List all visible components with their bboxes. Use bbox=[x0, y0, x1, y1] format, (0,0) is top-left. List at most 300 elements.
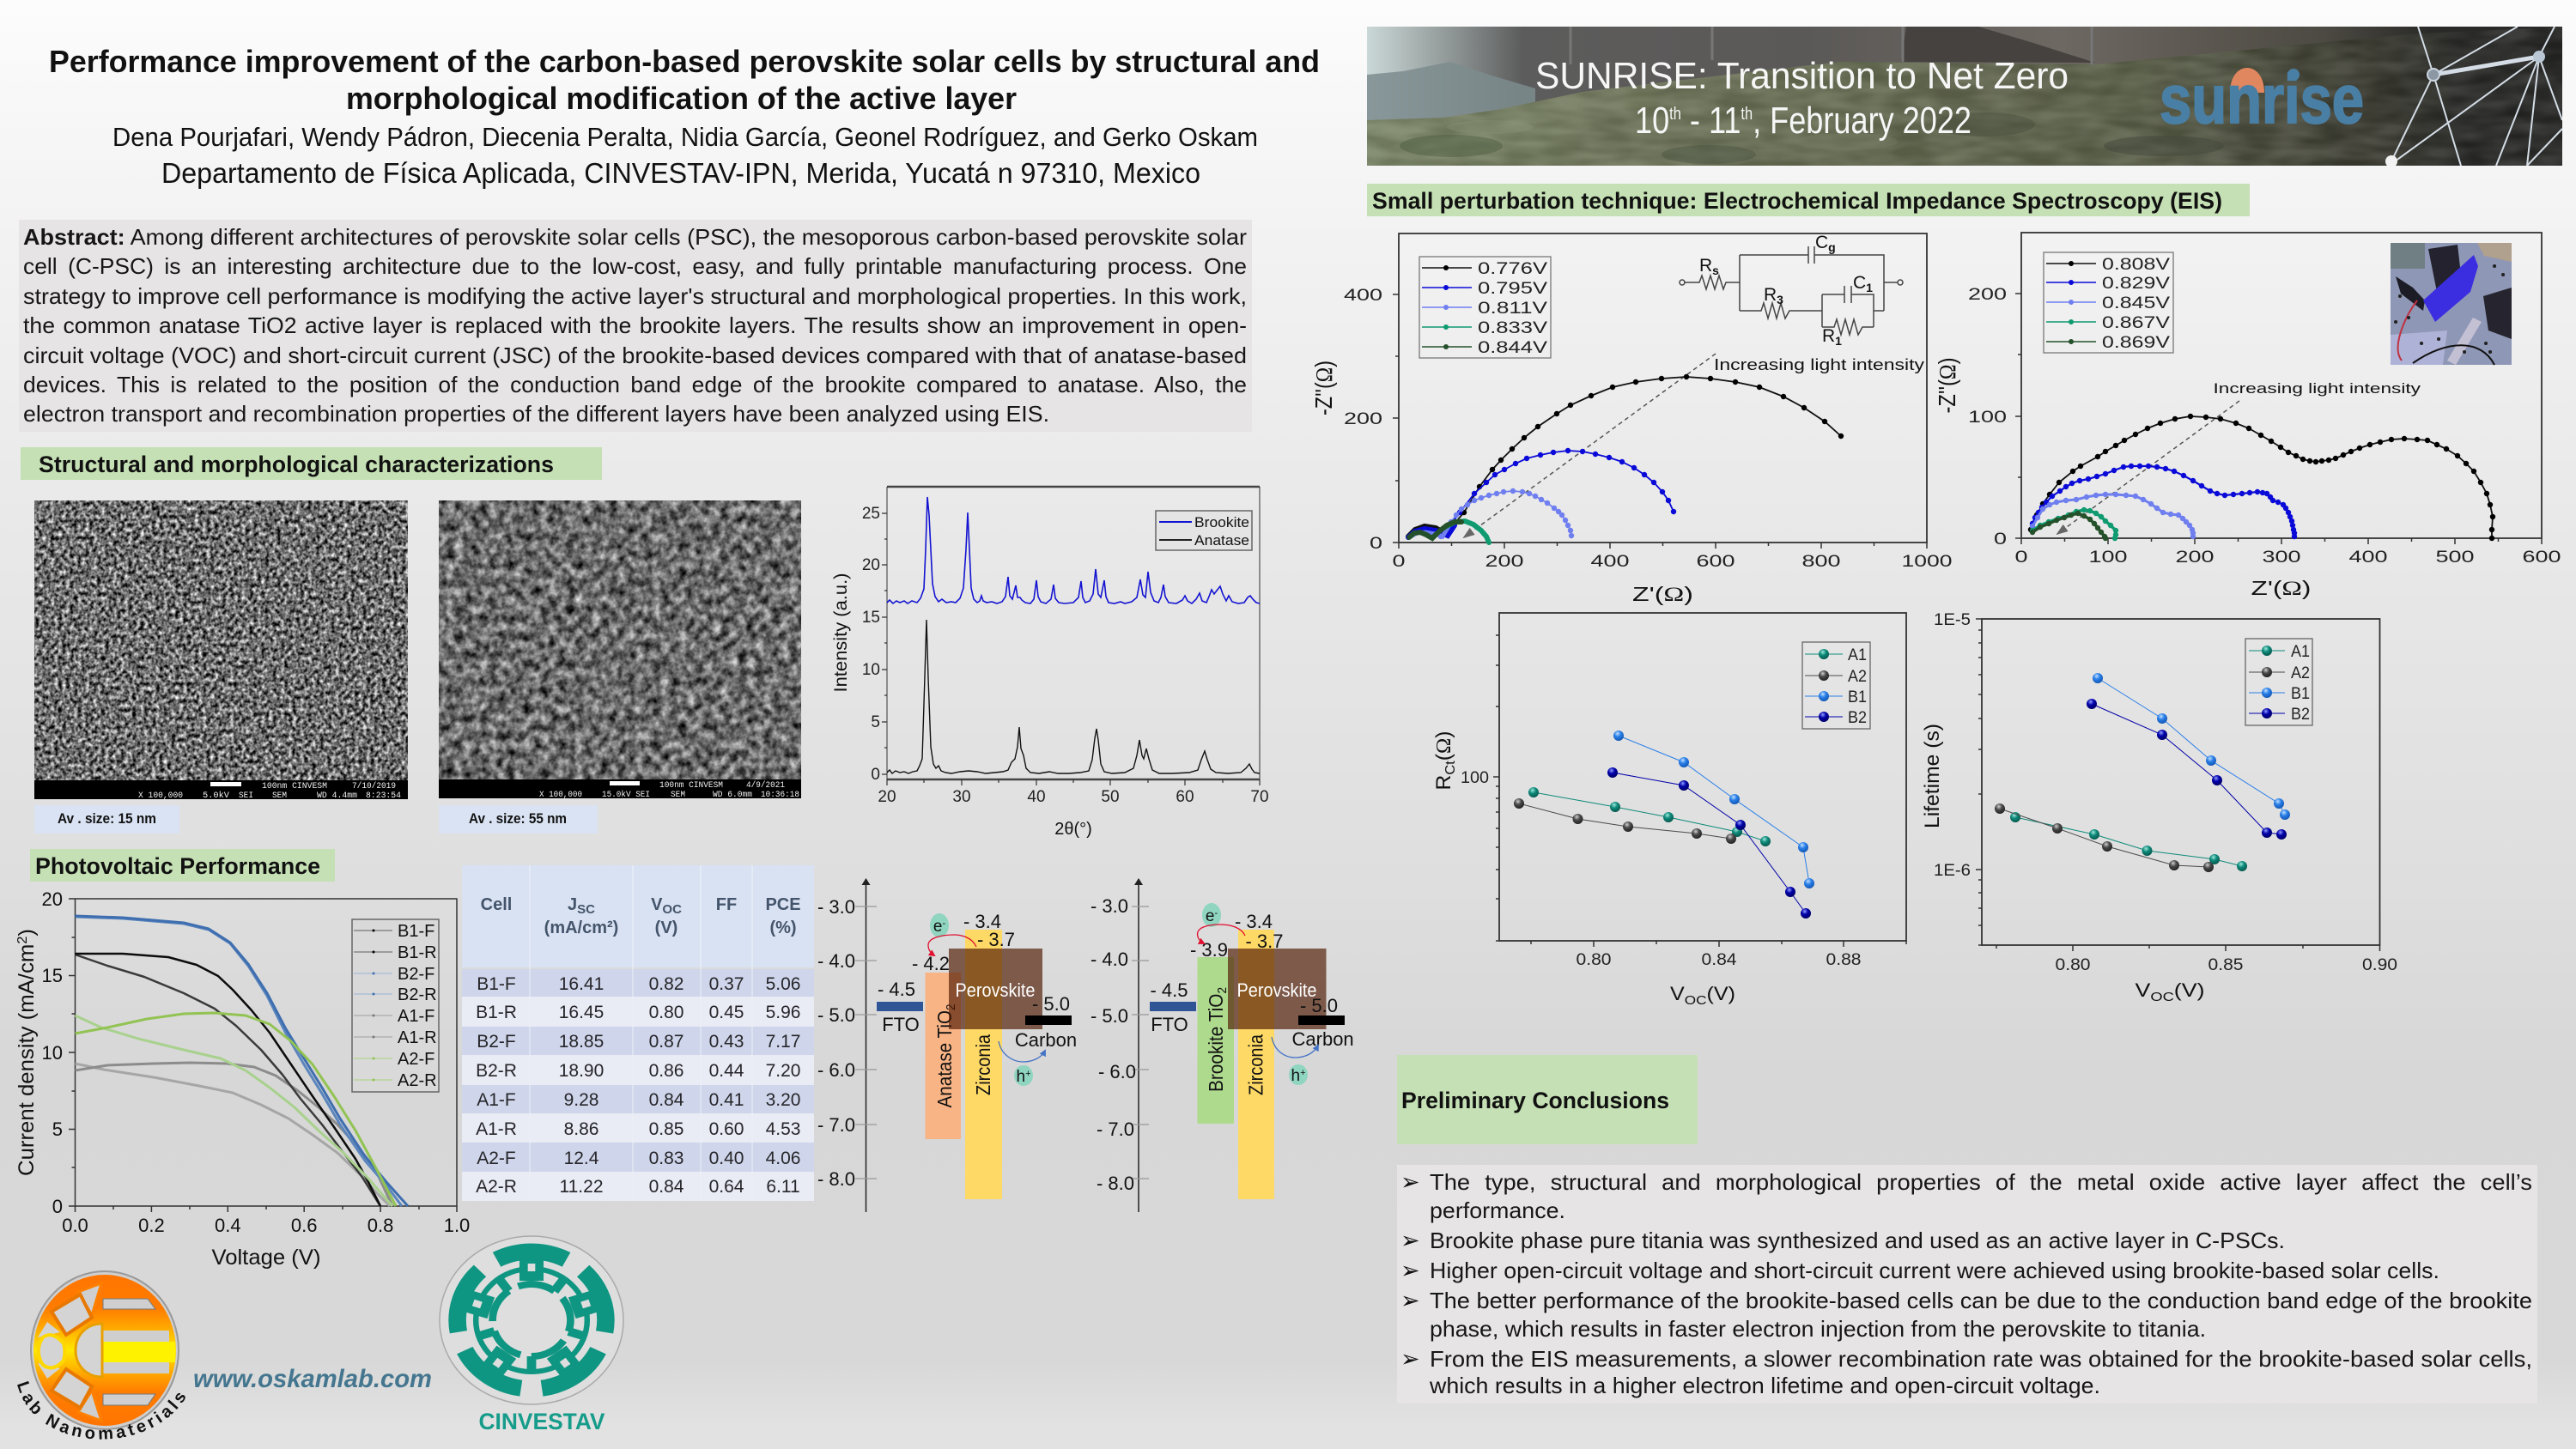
conclusion 2: Brookite phase pure titania was synthesized and used as an active layer in C-PSCs. bbox=[1430, 1228, 2285, 1253]
J-V legend: B2-R bbox=[398, 985, 437, 1004]
table row B1-F: B1-F bbox=[477, 974, 516, 994]
series 0.869 V bbox=[2032, 513, 2105, 538]
y tick labels: 200 bbox=[1968, 286, 2007, 304]
J-V x tick labels: 0.4 bbox=[215, 1215, 241, 1236]
logo: Lab Nanomaterials bbox=[17, 1270, 185, 1440]
level labels: - 3.9 bbox=[1190, 939, 1228, 961]
carbon level: - 5.0 bbox=[1032, 993, 1070, 1015]
brookite layer bbox=[1197, 957, 1234, 1124]
panel: abstract: devices. This is related to the position of the conduction band edge of the brookite compared to anatase. Also, the bbox=[23, 372, 1247, 397]
legend: 0.833V bbox=[1478, 319, 1547, 337]
x tick labels: 400 bbox=[1590, 553, 1630, 571]
SEM micrograph: 15 nm: 5.0kV bbox=[203, 791, 229, 801]
FTO level: - 4.5 bbox=[1150, 979, 1188, 1001]
curve A1-R bbox=[76, 1064, 390, 1206]
table row A2-R bbox=[476, 1177, 800, 1197]
table row A2-F: 0.83 bbox=[649, 1149, 683, 1168]
y axis title: -Z''(Ω) bbox=[1311, 361, 1338, 415]
XRD x tick labels: 20 bbox=[878, 788, 896, 806]
tick labels: 0.90 bbox=[2362, 956, 2397, 974]
series 0.811 V bbox=[1441, 491, 1571, 537]
table row B2-F: 7.17 bbox=[766, 1032, 800, 1052]
equivalent circuit: R bbox=[1699, 256, 1712, 276]
heading: electrochemical impedance spectroscopy: Small perturbation technique: Electrochemical Impedance Spectroscopy (EIS) bbox=[1372, 188, 2222, 214]
SEM micrograph: 15 nm: WD 4.4mm bbox=[317, 791, 357, 801]
curve A2-R bbox=[76, 1016, 392, 1206]
SEM micrograph: 15 nm: SEM bbox=[272, 791, 287, 801]
hole transfer: + bbox=[1300, 1068, 1306, 1078]
x tick labels: 1000 bbox=[1901, 553, 1953, 571]
table row B2-R: 0.44 bbox=[709, 1061, 744, 1081]
banner date: th bbox=[1669, 105, 1681, 124]
legend: 0.795V bbox=[1478, 280, 1547, 298]
title: morphological modification of the active layer bbox=[346, 81, 1017, 116]
legend: B1 bbox=[2291, 685, 2310, 703]
legend: 0.845V bbox=[2102, 294, 2170, 312]
J-V y tick labels: 15 bbox=[42, 965, 63, 986]
logo caption: CINVESTAV bbox=[479, 1409, 605, 1434]
caption: average size 55 nm: Av . size: 55 nm bbox=[469, 810, 567, 827]
series 0.795 V bbox=[1443, 451, 1674, 535]
series B2 bbox=[1607, 767, 1811, 919]
J-V y axis title: Current density (mA/cm bbox=[15, 950, 39, 1176]
table row B1-F: 0.37 bbox=[709, 974, 744, 994]
x tick labels: 800 bbox=[1801, 553, 1841, 571]
SEM micrograph: 55 nm: 4/9/2021 bbox=[746, 780, 785, 791]
energy axis: - 4.0 bbox=[1091, 949, 1128, 970]
curve A1-F bbox=[76, 1063, 392, 1206]
equivalent circuit: g bbox=[1828, 240, 1836, 254]
zirconia layer: Zirconia bbox=[972, 1034, 994, 1095]
energy axis: - 7.0 bbox=[817, 1114, 855, 1136]
chart: Nyquist plot, brookite bbox=[1935, 233, 2561, 599]
panel: abstract bbox=[19, 220, 1252, 432]
energy axis: - 3.0 bbox=[1091, 895, 1128, 917]
equivalent circuit: R bbox=[1822, 326, 1835, 346]
equivalent circuit: R bbox=[1764, 285, 1777, 305]
hole transfer bbox=[1272, 1037, 1318, 1085]
XRD legend: Anatase bbox=[1194, 532, 1249, 549]
conclusion 5: which results in a higher electron lifetime and open-circuit voltage. bbox=[1429, 1373, 2100, 1398]
table row B1-R bbox=[476, 1003, 800, 1022]
banner title: SUNRISE: Transition to Net Zero bbox=[1535, 55, 2069, 97]
SEM micrograph: 55 nm: X 100,000 bbox=[539, 791, 582, 800]
J-V x tick labels: 0.2 bbox=[138, 1215, 165, 1236]
legend: B1 bbox=[1848, 688, 1867, 706]
heading: preliminary conclusions: Preliminary Conclusions bbox=[1401, 1088, 1669, 1113]
authors: Dena Pourjafari, Wendy Pádron, Diecenia Peralta, Nidia García, Geonel Rodríguez, and Gerko Oskam bbox=[112, 122, 1258, 152]
equivalent circuit: C bbox=[1815, 233, 1828, 252]
legend bbox=[1419, 257, 1551, 358]
level labels bbox=[912, 911, 1015, 974]
energy axis: - 8.0 bbox=[1097, 1173, 1134, 1194]
zirconia layer bbox=[1238, 930, 1274, 1199]
x tick labels: 400 bbox=[2349, 549, 2387, 567]
energy axis: - 5.0 bbox=[1091, 1005, 1128, 1027]
perovskite layer bbox=[949, 949, 1042, 1029]
y tick labels: 100 bbox=[1968, 409, 2007, 427]
J-V x tick labels: 0.8 bbox=[368, 1215, 393, 1236]
energy axis bbox=[1091, 879, 1149, 1212]
tick labels bbox=[1461, 769, 1862, 969]
series B1 bbox=[1613, 731, 1814, 888]
SEM micrograph: 55 nm: 100nm CINVESM bbox=[659, 781, 723, 791]
banner date: , February 2022 bbox=[1753, 100, 1971, 142]
tick labels: 1E-6 bbox=[1934, 862, 1971, 880]
energy axis: - 8.0 bbox=[817, 1168, 855, 1190]
table row A1-R bbox=[476, 1119, 800, 1139]
legend: B2 bbox=[2291, 706, 2310, 724]
legend: A2 bbox=[1848, 668, 1867, 686]
XRD y tick labels: 15 bbox=[862, 609, 880, 627]
y tick labels: 200 bbox=[1344, 410, 1382, 428]
trend annotation: Increasing light intensity bbox=[1714, 356, 1924, 373]
x tick labels: 200 bbox=[1485, 553, 1523, 571]
electron transfer: - bbox=[942, 919, 945, 929]
conclusion 1: performance. bbox=[1430, 1197, 1565, 1223]
SEM micrograph: 15 nm: 7/10/2019 bbox=[352, 781, 396, 791]
XRD x tick labels: 30 bbox=[952, 788, 971, 806]
chart: J-V curves bbox=[15, 888, 470, 1270]
low-frequency arcs bbox=[1408, 521, 1489, 543]
y axis title: -Z''(Ω) bbox=[1935, 357, 1961, 414]
series B1 bbox=[2093, 673, 2290, 820]
x axis title: (V) bbox=[2174, 979, 2205, 1001]
perovskite layer bbox=[1228, 949, 1326, 1029]
table row A2-F bbox=[477, 1149, 800, 1168]
table row B1-R: 0.80 bbox=[649, 1003, 683, 1022]
equivalent circuit: C bbox=[1853, 273, 1866, 293]
chart: electron lifetime vs voltage bbox=[1921, 611, 2397, 1004]
energy axis: - 4.0 bbox=[817, 950, 855, 972]
series B2 bbox=[2087, 699, 2287, 840]
y tick labels: 0 bbox=[1370, 535, 1382, 553]
legend: 0.811V bbox=[1478, 300, 1547, 318]
conclusion 2: ➢ bbox=[1400, 1228, 1420, 1254]
tick labels: 0.84 bbox=[1702, 951, 1737, 969]
conclusion 1: ➢ bbox=[1400, 1169, 1420, 1196]
XRD y tick labels: 25 bbox=[862, 505, 880, 523]
J-V legend: A2-F bbox=[398, 1050, 434, 1069]
FTO level: FTO bbox=[1151, 1014, 1188, 1035]
table row B1-R: 5.96 bbox=[766, 1003, 800, 1022]
x tick labels: 100 bbox=[2088, 549, 2128, 567]
XRD legend bbox=[1156, 511, 1252, 550]
conclusion 5: From the EIS measurements, a slower recombination rate was obtained for the brookite-based solar cells, bbox=[1430, 1346, 2532, 1372]
table row B2-F: 0.43 bbox=[709, 1032, 744, 1052]
table header: (%) bbox=[769, 919, 797, 937]
equivalent circuit: s bbox=[1712, 264, 1719, 277]
series A2 bbox=[1514, 798, 1736, 844]
electron transfer: - bbox=[1214, 908, 1218, 919]
J-V y axis title: 2 bbox=[15, 936, 30, 944]
table row A1-R: 0.60 bbox=[709, 1119, 744, 1139]
table row B1-F bbox=[477, 974, 800, 994]
J-V legend: A2-R bbox=[398, 1071, 437, 1090]
J-V y tick labels bbox=[42, 888, 63, 1217]
photo: measurement setup bbox=[2391, 243, 2512, 365]
J-V y tick labels: 0 bbox=[52, 1196, 63, 1217]
J-V legend: B1-R bbox=[398, 943, 437, 962]
J-V y tick labels: 5 bbox=[52, 1119, 63, 1140]
curve A2-F bbox=[76, 1013, 396, 1206]
SEM micrograph: 55 nm: SEM bbox=[671, 791, 685, 800]
table row A1-R: 8.86 bbox=[564, 1119, 598, 1139]
x axis title: Z'( Ω ) bbox=[2251, 577, 2312, 599]
J-V legend bbox=[352, 919, 439, 1092]
panel: abstract: strategy to improve cell performance is modifying the active layer's structural and morphological properties. In this work, bbox=[23, 283, 1247, 309]
zirconia layer bbox=[965, 930, 1002, 1199]
SEM micrograph: 15 nm bbox=[34, 500, 408, 801]
conclusion 1 bbox=[1400, 1169, 2532, 1223]
energy axis: - 7.0 bbox=[1097, 1119, 1134, 1140]
energy axis: - 6.0 bbox=[817, 1059, 855, 1081]
conclusion 4: ➢ bbox=[1400, 1288, 1420, 1314]
carbon level: Carbon bbox=[1015, 1029, 1077, 1051]
y axis title: ( bbox=[1432, 754, 1455, 761]
table row A2-F: 4.06 bbox=[766, 1149, 800, 1168]
band diagram: brookite device bbox=[1091, 879, 1354, 1212]
table header: J bbox=[568, 895, 577, 914]
conclusion 4 bbox=[1400, 1288, 2532, 1342]
J-V legend: B2-F bbox=[398, 965, 434, 984]
table row B1-F: 5.06 bbox=[766, 974, 800, 994]
y axis title: Ct bbox=[1443, 761, 1458, 775]
table header: FF bbox=[716, 895, 737, 914]
x tick labels: 0 bbox=[1393, 553, 1405, 571]
level labels: - 3.7 bbox=[1245, 931, 1284, 952]
table row A1-F bbox=[477, 1090, 800, 1110]
anatase curve bbox=[887, 620, 1260, 773]
table row A1-F: 3.20 bbox=[766, 1090, 800, 1110]
x axis title: (V) bbox=[1706, 983, 1735, 1004]
carbon level: - 5.0 bbox=[1300, 995, 1338, 1016]
XRD y tick labels: 10 bbox=[862, 661, 880, 679]
FTO level bbox=[1150, 979, 1196, 1035]
electron transfer: e bbox=[933, 918, 942, 936]
table row B2-R: B2-R bbox=[476, 1061, 517, 1081]
energy axis bbox=[817, 879, 877, 1212]
table row A2-R: 0.84 bbox=[649, 1177, 684, 1197]
legend: 0.829V bbox=[2102, 275, 2170, 293]
SEM micrograph: 55 nm: WD 6.0mm bbox=[713, 791, 752, 800]
y axis title: Ω) bbox=[1432, 731, 1455, 754]
x tick labels: 600 bbox=[1697, 553, 1735, 571]
curve B2-F bbox=[76, 916, 408, 1206]
level labels bbox=[1190, 911, 1284, 961]
tick labels: 0.85 bbox=[2208, 956, 2243, 974]
energy axis: - 3.0 bbox=[817, 896, 855, 918]
XRD x tick labels: 50 bbox=[1101, 788, 1120, 806]
tick labels bbox=[1934, 611, 2397, 974]
brookite curve bbox=[887, 497, 1260, 603]
XRD y tick labels: 5 bbox=[871, 713, 880, 731]
SEM micrograph: 55 nm: 15.0kV SEI bbox=[602, 790, 650, 800]
table header: OC bbox=[662, 902, 682, 917]
legend: 0.776V bbox=[1478, 260, 1547, 278]
anatase layer: Anatase TiO bbox=[933, 999, 956, 1107]
table row A2-F: A2-F bbox=[477, 1149, 516, 1168]
table row B2-F: B2-F bbox=[477, 1032, 516, 1052]
curve B1-R bbox=[76, 955, 380, 1206]
y tick labels bbox=[1968, 286, 2007, 549]
panel: abstract: electron transport and recombination properties of the different layers have been analyzed using EIS. bbox=[23, 401, 1049, 427]
table row B1-R: B1-R bbox=[476, 1003, 517, 1022]
table row B2-F: 18.85 bbox=[559, 1032, 604, 1052]
heading: preliminary conclusions bbox=[1397, 1055, 1698, 1144]
series 0.808 V bbox=[2031, 416, 2493, 538]
conclusion 5 bbox=[1400, 1346, 2532, 1398]
logo: sunrise bbox=[2160, 68, 2363, 124]
tick labels: 1E-5 bbox=[1934, 611, 1971, 629]
carbon level bbox=[1292, 995, 1354, 1050]
panel: abstract: circuit voltage (VOC) and short-circuit current (JSC) of the brookite-based devices compared with that of anatase-based bbox=[23, 343, 1247, 368]
x tick labels: 500 bbox=[2435, 549, 2475, 567]
J-V legend: B1-F bbox=[398, 922, 434, 941]
table row B2-R: 0.86 bbox=[649, 1061, 683, 1081]
XRD y tick labels: 0 bbox=[871, 766, 880, 784]
series A1 bbox=[2010, 812, 2247, 871]
J-V y tick labels: 20 bbox=[42, 888, 63, 910]
banner date: - 11 bbox=[1681, 100, 1741, 142]
series 0.845 V bbox=[2032, 494, 2193, 537]
XRD x tick labels: 70 bbox=[1250, 788, 1269, 806]
table row A1-F: 0.41 bbox=[709, 1090, 744, 1110]
x axis title: OC bbox=[2150, 990, 2174, 1004]
zirconia layer: Zirconia bbox=[1245, 1034, 1267, 1095]
J-V y axis title: ) bbox=[15, 929, 39, 937]
table row B2-R: 7.20 bbox=[766, 1061, 800, 1081]
x axis title: OC bbox=[1685, 993, 1707, 1008]
XRD legend: Brookite bbox=[1194, 514, 1249, 530]
heading: photovoltaic performance: Photovoltaic Performance bbox=[35, 853, 320, 879]
level labels: - 3.4 bbox=[1235, 911, 1273, 932]
table header: Cell bbox=[481, 895, 512, 914]
caption: average size 15 nm bbox=[34, 805, 179, 834]
XRD x tick labels bbox=[878, 788, 1269, 806]
table row A2-R: 11.22 bbox=[560, 1177, 603, 1197]
table row A1-F: 0.84 bbox=[649, 1090, 684, 1110]
banner date: 10 bbox=[1635, 100, 1677, 142]
legend: 0.867V bbox=[2102, 314, 2170, 332]
affiliation: Departamento de Física Aplicada, CINVESTAV-IPN, Merida, Yucatá n 97310, Mexico bbox=[161, 157, 1200, 189]
table row A2-R: 6.11 bbox=[766, 1177, 800, 1197]
perovskite layer: Perovskite bbox=[1236, 979, 1317, 1001]
x tick labels: 0 bbox=[2014, 549, 2028, 567]
XRD x tick labels: 60 bbox=[1176, 788, 1194, 806]
series A2 bbox=[1995, 803, 2214, 872]
trend annotation: Increasing light intensity bbox=[2214, 380, 2421, 397]
legend: 0.844V bbox=[1478, 339, 1547, 357]
trend annotation bbox=[1464, 354, 1924, 537]
tick labels: 100 bbox=[1461, 769, 1489, 787]
electron transfer bbox=[928, 913, 976, 955]
equivalent circuit: 1 bbox=[1835, 334, 1842, 348]
table header: SC bbox=[577, 902, 595, 917]
hole transfer: h bbox=[1016, 1068, 1025, 1086]
legend: A2 bbox=[2291, 664, 2310, 682]
FTO level: FTO bbox=[882, 1014, 920, 1035]
SEM micrograph: 15 nm: 100nm CINVESM bbox=[262, 782, 327, 791]
conclusion 3: Higher open-circuit voltage and short-circuit current were achieved using brookite-based solar cells. bbox=[1430, 1258, 2439, 1283]
title: Performance improvement of the carbon-based perovskite solar cells by structural and bbox=[49, 44, 1320, 79]
table header: (V) bbox=[655, 919, 677, 937]
caption: average size 55 nm bbox=[439, 805, 598, 834]
legend: 0.869V bbox=[2102, 334, 2170, 352]
anatase layer: 2 bbox=[944, 1004, 958, 1010]
energy axis: - 6.0 bbox=[1098, 1061, 1136, 1082]
legend bbox=[2245, 639, 2312, 725]
website link: www.oskamlab.com bbox=[193, 1365, 432, 1393]
conclusion 5: ➢ bbox=[1400, 1346, 1420, 1373]
perovskite layer: Perovskite bbox=[955, 979, 1036, 1001]
FTO level: - 4.5 bbox=[878, 979, 915, 1000]
table row A2-R: A2-R bbox=[476, 1177, 517, 1197]
energy axis: - 5.0 bbox=[817, 1004, 855, 1026]
J-V x tick labels bbox=[62, 1215, 470, 1236]
carbon level bbox=[1015, 993, 1077, 1051]
title bbox=[49, 44, 1320, 116]
level labels: - 3.4 bbox=[963, 911, 1001, 932]
electron transfer: e bbox=[1206, 907, 1214, 925]
conclusion 4: phase, which results in faster electron injection from the perovskite to titania. bbox=[1430, 1316, 2206, 1342]
x tick labels bbox=[2014, 549, 2561, 567]
level labels: - 4.2 bbox=[912, 953, 950, 974]
J-V x tick labels: 0.6 bbox=[291, 1215, 317, 1236]
table row A2-R: 0.64 bbox=[709, 1177, 744, 1197]
SEM micrograph: 55 nm bbox=[439, 500, 801, 800]
carbon level: Carbon bbox=[1292, 1028, 1354, 1050]
legend bbox=[2044, 252, 2173, 353]
table header: (mA/cm²) bbox=[544, 919, 618, 937]
y tick labels: 0 bbox=[1994, 530, 2007, 549]
tick labels: 0.80 bbox=[1577, 951, 1611, 969]
equivalent circuit bbox=[1680, 233, 1903, 348]
x axis title: V bbox=[2135, 979, 2148, 1001]
hole transfer bbox=[999, 1041, 1045, 1086]
band diagram: anatase device bbox=[817, 879, 1077, 1212]
FTO level bbox=[877, 979, 923, 1035]
trend annotation bbox=[2057, 380, 2421, 534]
series 0.829 V bbox=[2032, 466, 2294, 537]
anatase layer bbox=[926, 973, 961, 1139]
logo caption: Lab Nanomaterials bbox=[17, 1380, 185, 1440]
XRD x tick labels: 40 bbox=[1027, 788, 1046, 806]
conclusion 4: The better performance of the brookite-based cells can be due to the conduction band edge of the brookite bbox=[1430, 1288, 2532, 1313]
legend: A1 bbox=[2291, 643, 2310, 661]
legend: A1 bbox=[1848, 646, 1867, 664]
curve B1-F bbox=[76, 954, 380, 1206]
chart: Nyquist plot, anatase bbox=[1311, 233, 1953, 605]
table row B1-F: 0.82 bbox=[649, 974, 683, 994]
table row B2-R bbox=[476, 1061, 800, 1081]
x tick labels: 600 bbox=[2523, 549, 2561, 567]
conclusion 1: The type, structural and morphological properties of the metal oxide active layer affect the cell’s bbox=[1430, 1169, 2532, 1195]
J-V y tick labels: 10 bbox=[42, 1042, 63, 1064]
caption: average size 15 nm: Av . size: 15 nm bbox=[58, 810, 156, 827]
chart: XRD patterns bbox=[831, 487, 1269, 839]
J-V legend: A1-F bbox=[398, 1007, 434, 1026]
table row B1-F: 16.41 bbox=[559, 974, 604, 994]
table header: V bbox=[651, 895, 662, 914]
electron transfer bbox=[1197, 903, 1245, 943]
table row B2-F bbox=[477, 1032, 800, 1052]
table row B1-R: 16.45 bbox=[559, 1003, 604, 1022]
series A1 bbox=[1528, 787, 1771, 846]
J-V legend: A1-R bbox=[398, 1028, 437, 1047]
banner: SUNRISE conference bbox=[1367, 27, 2562, 167]
y axis title: Lifetime (s) bbox=[1921, 724, 1944, 828]
